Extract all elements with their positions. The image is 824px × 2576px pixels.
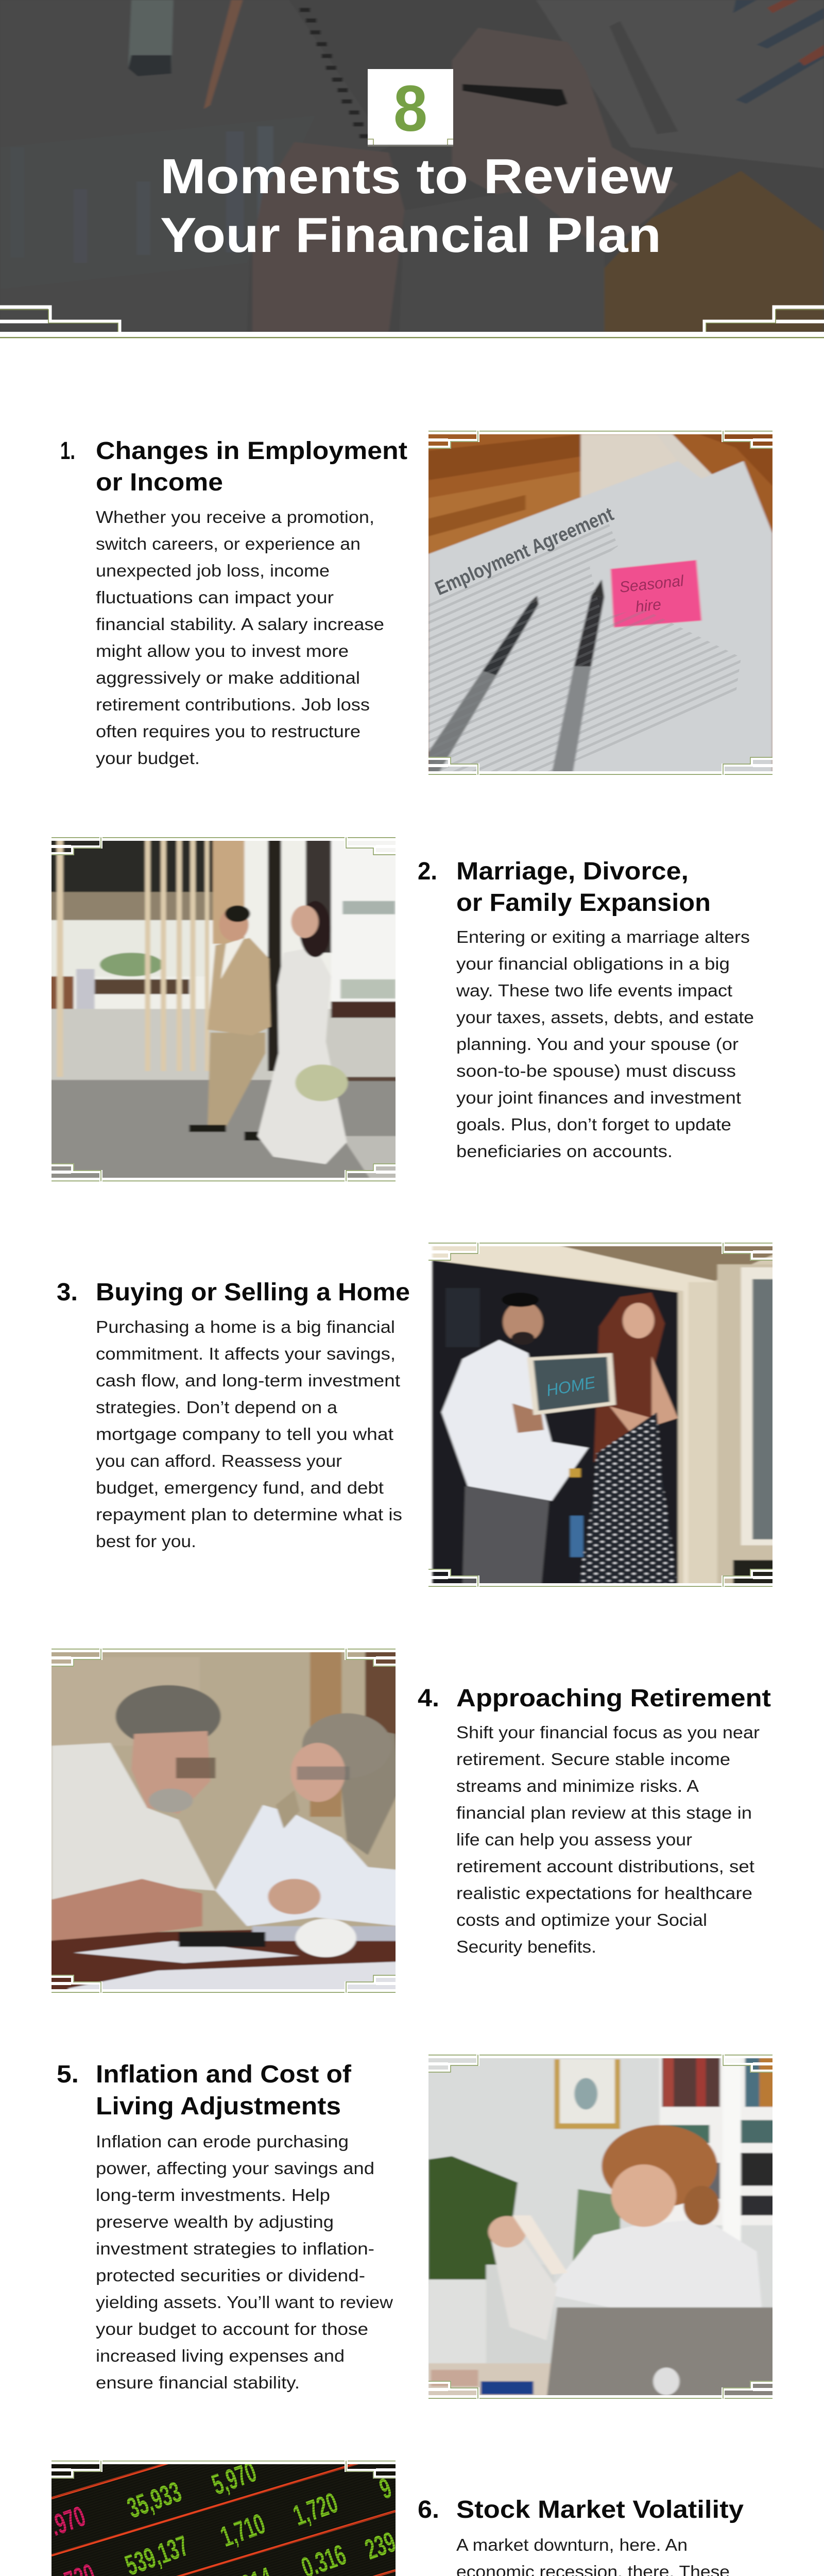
photo: stock ticker board: 5,970 (208, 2455, 261, 2501)
body text 6 (456, 2535, 740, 2576)
photo frame 6 (52, 2461, 396, 2576)
photo: stock ticker board (46, 2395, 400, 2576)
header background photo: hands writing on documents (0, 0, 824, 335)
photo: older couple reviewing papers at a table (47, 1645, 400, 1997)
stepped white frame: right corner (705, 307, 824, 335)
body text 4: retirement. Secure stable income (456, 1750, 730, 1769)
heading 6: Stock Market Volatility (456, 2496, 744, 2523)
body text 5: Inflation can erode purchasing (96, 2132, 349, 2151)
body text 1: unexpected job loss, income (96, 561, 330, 580)
body text 1: often requires you to restructure (96, 722, 360, 741)
title: Moments to Review (160, 149, 673, 204)
photo frame 3 (428, 1243, 772, 1587)
body text 4: streams and minimize risks. A (456, 1776, 699, 1795)
body text 2: your taxes, assets, debts, and estate (456, 1008, 754, 1027)
body text 4: financial plan review at this stage in (456, 1803, 752, 1822)
photo: couple at front door holding a chalkboard (426, 1241, 778, 1589)
photo: employment agreement with pens and sticky note: hire (634, 596, 662, 616)
body text 3: cash flow, and long-term investment (96, 1371, 400, 1390)
body text 5: ensure financial stability. (96, 2373, 300, 2392)
title (160, 149, 673, 263)
panel: 4 approaching retirement (47, 1645, 771, 1997)
body text 4: Shift your financial focus as you near (456, 1723, 760, 1742)
stepped white frame: left corner (0, 307, 119, 335)
body text 5: preserve wealth by adjusting (96, 2212, 334, 2231)
body text 2: goals. Plus, don’t forget to update (456, 1115, 731, 1134)
photo: employment agreement with pens and sticky note: Seasonal (619, 572, 685, 596)
photo: stock ticker board: 1,710 (216, 2507, 269, 2553)
body text 1: your budget. (96, 749, 200, 768)
header bottom band (0, 332, 824, 338)
body text 5 (96, 2132, 393, 2392)
photo: stock ticker board: .970 (46, 2500, 90, 2542)
heading 3: 3. (57, 1279, 78, 1306)
body text 5: investment strategies to inflation- (96, 2239, 374, 2258)
photo: stock ticker board: 239 (361, 2526, 400, 2566)
body text 4 (456, 1723, 760, 1956)
heading 1: or Income (96, 469, 223, 496)
body text 6: A market downturn, here. An (456, 2535, 688, 2554)
photo: stock ticker board: 9 (375, 2471, 396, 2505)
heading 2 (418, 858, 711, 917)
heading 2: Marriage, Divorce, (456, 858, 689, 885)
photo: stock ticker board: 35,933 (123, 2475, 185, 2524)
heading 2: or Family Expansion (456, 889, 711, 917)
photo: couple at front door holding a chalkboard: HOME (545, 1373, 597, 1400)
heading 4: 4. (418, 1685, 439, 1712)
body text 1: Whether you receive a promotion, (96, 507, 374, 527)
body text 1: retirement contributions. Job loss (96, 695, 370, 714)
photo: employment agreement with pens and sticky note (426, 429, 778, 777)
body text 4: realistic expectations for healthcare (456, 1884, 752, 1903)
heading 5: Living Adjustments (96, 2093, 341, 2120)
panel: 2 marriage, divorce, or family expansion (47, 835, 754, 1183)
body text 2: planning. You and your spouse (or (456, 1035, 739, 1054)
body text 5: increased living expenses and (96, 2346, 345, 2365)
photo frame 1 (428, 431, 772, 775)
photo frame 4 (52, 1649, 396, 1993)
number badge (368, 69, 453, 146)
body text 5: protected securities or dividend- (96, 2266, 365, 2285)
body text 4: life can help you assess your (456, 1830, 692, 1849)
body text 5: power, affecting your savings and (96, 2159, 374, 2178)
body text 1: switch careers, or experience an (96, 534, 360, 553)
panel: 6 stock market volatility (52, 2461, 744, 2576)
body text 3: you can afford. Reassess your (96, 1451, 342, 1470)
title: Your Financial Plan (160, 208, 661, 263)
body text 3 (96, 1317, 402, 1551)
heading 6: 6. (418, 2496, 439, 2523)
heading 4: Approaching Retirement (456, 1685, 771, 1712)
body text 1: fluctuations can impact your (96, 588, 334, 607)
body text 3: best for you. (96, 1532, 196, 1551)
body text 2: your joint finances and investment (456, 1088, 741, 1107)
header banner (0, 0, 824, 338)
body text 5: long-term investments. Help (96, 2185, 330, 2205)
body text 5: yielding assets. You’ll want to review (96, 2293, 393, 2312)
body text 5: your budget to account for those (96, 2319, 368, 2338)
photo: employment agreement with pens and sticky note: Employment Agreement (432, 503, 617, 600)
heading 5 (57, 2061, 352, 2120)
panel: 1 changes in employment or income (60, 429, 778, 777)
body text 1: might allow you to invest more (96, 641, 349, 660)
heading 1 (60, 437, 407, 496)
heading 2: 2. (418, 858, 437, 885)
heading 5: Inflation and Cost of (96, 2061, 352, 2088)
panel: 3 buying or selling a home (57, 1241, 778, 1589)
photo: wedding couple holding hands (47, 835, 400, 1183)
body text 3: Purchasing a home is a big financial (96, 1317, 395, 1336)
body text 2: beneficiaries on accounts. (456, 1142, 673, 1161)
body text 3: budget, emergency fund, and debt (96, 1478, 384, 1497)
photo frame 2 (52, 837, 396, 1181)
body text 4: costs and optimize your Social (456, 1910, 707, 1929)
heading 1: 1. (60, 437, 75, 465)
body text 2 (456, 927, 754, 1161)
body text 3: strategies. Don’t depend on a (96, 1398, 338, 1417)
heading 3: Buying or Selling a Home (96, 1279, 410, 1306)
heading 1: Changes in Employment (96, 437, 407, 465)
body text 2: your financial obligations in a big (456, 954, 730, 973)
panel: 5 inflation and cost of living adjustments (57, 2051, 778, 2403)
body text 1 (96, 507, 384, 768)
body text 2: Entering or exiting a marriage alters (456, 927, 750, 946)
body text 2: way. These two life events impact (456, 981, 732, 1000)
body text 1: financial stability. A salary increase (96, 615, 384, 634)
photo frame 5 (428, 2055, 772, 2399)
body text 3: mortgage company to tell you what (96, 1425, 393, 1444)
photo: stock ticker board: 1,720 (289, 2486, 342, 2532)
number badge: 8 (393, 72, 427, 145)
body text 3: commitment. It affects your savings, (96, 1344, 396, 1363)
body text 1: aggressively or make additional (96, 668, 360, 687)
heading 5: 5. (57, 2061, 79, 2088)
body text 2: soon-to-be spouse) must discuss (456, 1061, 736, 1080)
body text 4: retirement account distributions, set (456, 1857, 754, 1876)
body text 4: Security benefits. (456, 1937, 596, 1956)
photo: woman checking a receipt at her laptop (426, 2051, 778, 2403)
body text 3: repayment plan to determine what is (96, 1505, 402, 1524)
